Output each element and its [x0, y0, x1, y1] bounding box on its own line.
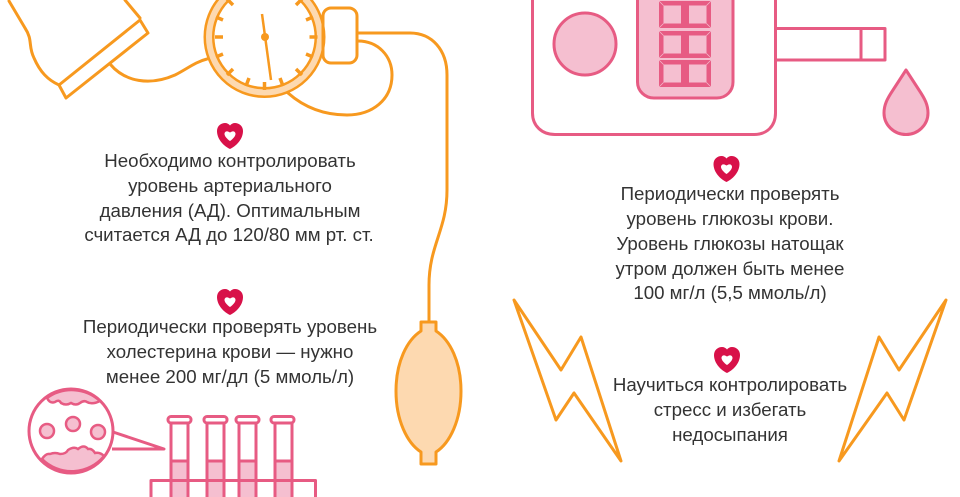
icon: lightning bolt left: [514, 300, 621, 461]
text: stress: недосыпания: [672, 424, 788, 445]
icon: pressure bulb: [396, 322, 461, 464]
text: glucose: [616, 183, 844, 303]
text: cholesterol: Периодически проверять уровень: [83, 316, 377, 337]
icon: heart bullet 2: [217, 289, 243, 315]
text: cholesterol: холестерина крови — нужно: [107, 341, 353, 362]
text: glucose: утром должен быть менее: [616, 258, 844, 279]
text: stress: [613, 374, 847, 445]
icon: heart bullet 1: [217, 123, 243, 149]
text: stress: стресс и избегать: [654, 399, 806, 420]
text: stress: Научиться контролировать: [613, 374, 847, 395]
icon: pressure gauge: [209, 0, 320, 92]
text: glucose: Уровень глюкозы натощак: [616, 233, 844, 254]
text: cholesterol: [83, 316, 377, 387]
text: blood pressure: давления (АД). Оптимальным: [100, 200, 360, 221]
icon: gauge connector and tubes: [288, 8, 447, 321]
text: glucose: уровень глюкозы крови.: [627, 208, 833, 229]
icon: test tubes in rack: [151, 416, 316, 497]
icon: blood drop: [884, 70, 928, 134]
text: blood pressure: считается АД до 120/80 мм рт. ст.: [84, 224, 374, 245]
icon: glucose meter: [532, 0, 885, 134]
text: blood pressure: [84, 150, 374, 245]
text: blood pressure: Необходимо контролировать: [104, 150, 356, 171]
icon: magnified blood vessel: [29, 389, 164, 473]
text: cholesterol: менее 200 мг/дл (5 ммоль/л): [106, 366, 354, 387]
icon: heart bullet 4: [714, 347, 740, 373]
text: blood pressure: уровень артериального: [128, 175, 332, 196]
text: glucose: Периодически проверять: [621, 183, 839, 204]
icon: lightning bolt right: [839, 300, 946, 461]
icon: blood pressure cuff: [9, 0, 207, 98]
text: glucose: 100 мг/л (5,5 ммоль/л): [633, 282, 827, 303]
icon: heart bullet 3: [714, 156, 740, 182]
